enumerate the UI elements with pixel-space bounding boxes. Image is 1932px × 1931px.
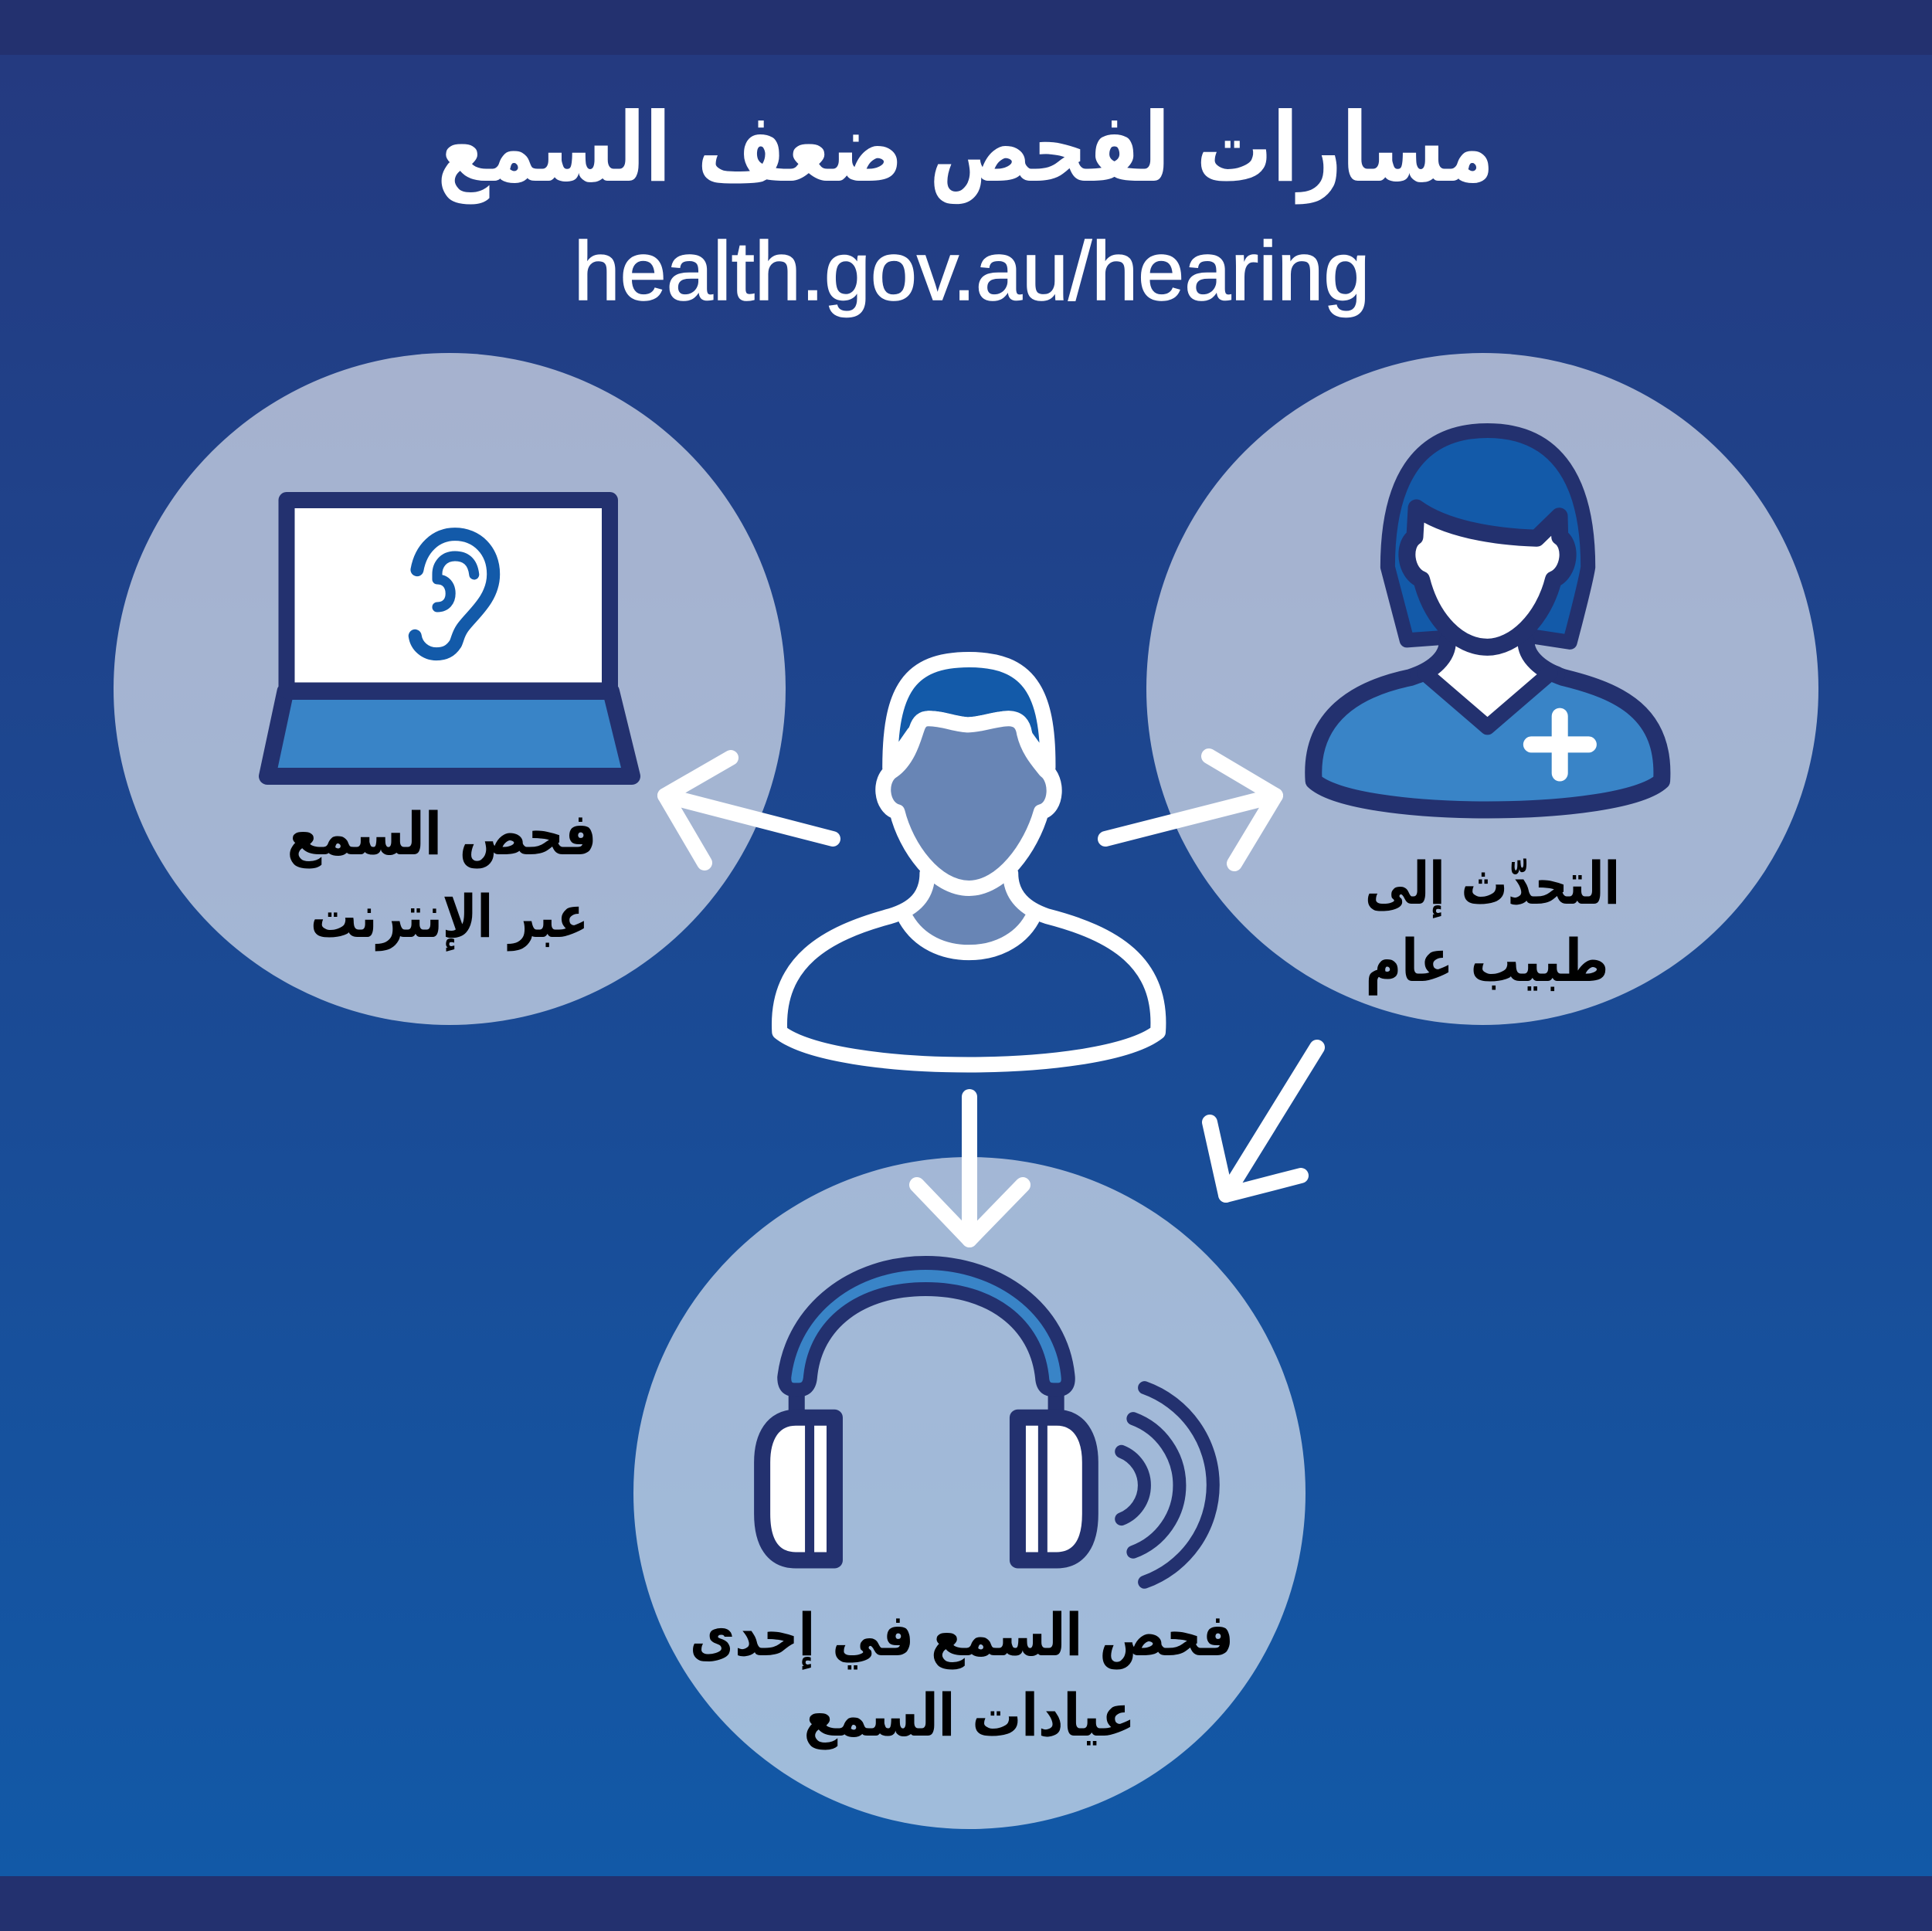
panel: talk to GP xyxy=(1146,353,1818,1025)
arrow: GP to clinic xyxy=(1210,1047,1317,1195)
url: health.gov.au/hearing xyxy=(574,224,1370,317)
bottom band xyxy=(0,1876,1932,1931)
label: hearing clinic: فحص السمع في إحدى xyxy=(690,1600,1234,1670)
arrow: to GP xyxy=(1105,756,1275,864)
icon: doctor xyxy=(1313,430,1662,810)
icon: headphones xyxy=(762,1263,1213,1582)
icon: ear xyxy=(415,535,494,654)
label: online check: فحص السمع xyxy=(287,799,596,869)
arrow: to clinic xyxy=(917,1097,1023,1240)
panel: hearing clinic xyxy=(633,1157,1306,1829)
label: talk to GP: طبيب عام xyxy=(1366,926,1608,995)
panel: online hearing check xyxy=(114,353,786,1025)
label: hearing clinic: عيادات السمع xyxy=(803,1681,1136,1750)
arrow: to online check xyxy=(665,758,833,863)
icon: laptop xyxy=(267,501,632,776)
icon: person xyxy=(779,660,1158,1064)
title: مسارات لفحص ضعف السمع xyxy=(437,93,1494,205)
label: talk to GP xyxy=(1365,849,1620,995)
label: talk to GP: التحدّث إلى xyxy=(1365,849,1620,918)
label: online check xyxy=(287,799,596,952)
label: hearing clinic xyxy=(690,1600,1234,1750)
label: online check: عبر الإنترنت xyxy=(311,882,589,952)
top band xyxy=(0,0,1932,55)
icon: medical cross xyxy=(1531,716,1588,773)
icon: sound waves xyxy=(1122,1388,1213,1582)
